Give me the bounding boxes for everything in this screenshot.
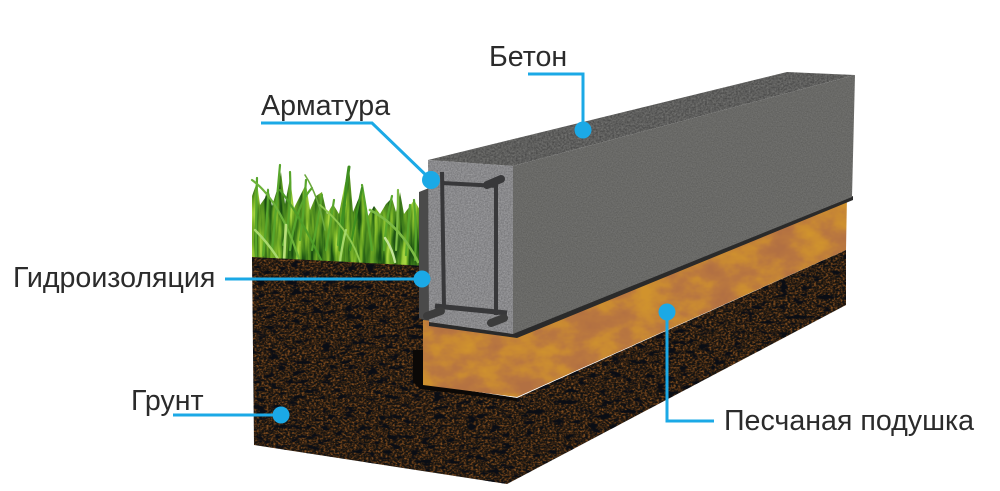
sand cushion: [423, 195, 853, 397]
reinforcement cage: [427, 172, 507, 323]
label: sand cushion: Песчаная подушка: [724, 405, 974, 437]
concrete strip: [428, 72, 855, 334]
label: concrete: [489, 41, 592, 138]
label: waterproofing: [13, 262, 430, 294]
label: soil: [131, 385, 290, 424]
label: sand cushion: [658, 304, 974, 437]
waterproofing membrane: [413, 188, 517, 401]
label: rebar: Арматура: [261, 90, 390, 122]
grass: [252, 165, 420, 267]
soil ground block: [252, 250, 846, 484]
label: soil: Грунт: [131, 385, 204, 417]
label: rebar: [261, 90, 440, 189]
label: concrete: Бетон: [489, 41, 567, 73]
label: waterproofing: Гидроизоляция: [13, 262, 215, 294]
